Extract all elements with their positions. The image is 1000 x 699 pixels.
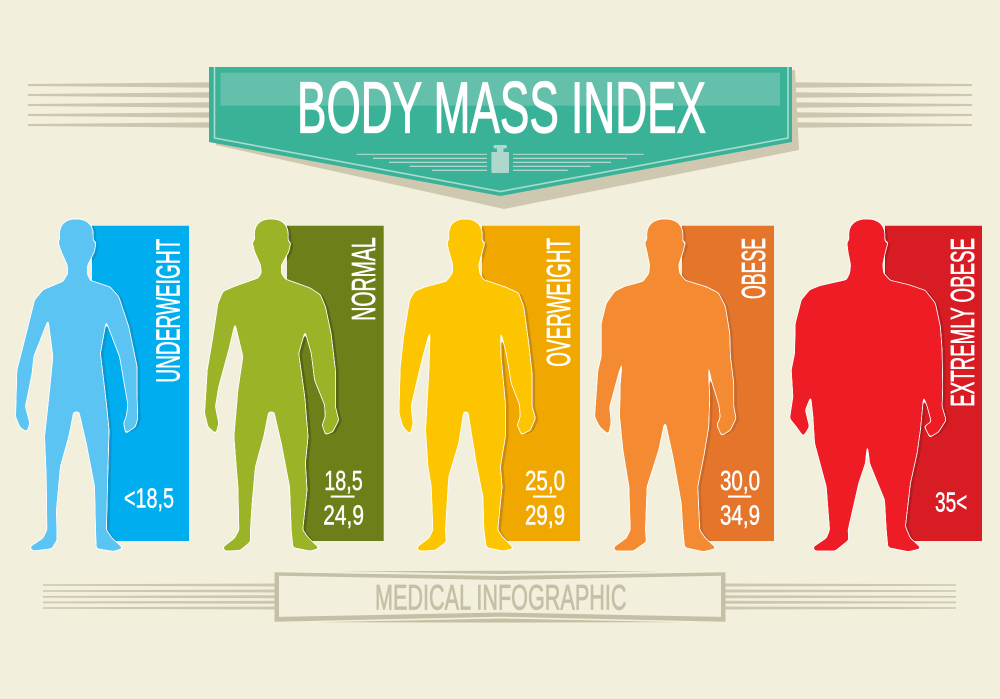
box frame: [274, 572, 726, 622]
value: [720, 465, 760, 530]
footer box: [274, 571, 726, 623]
value: 34,9: [720, 499, 760, 530]
header side lines: [28, 82, 972, 128]
banner shadow: [216, 70, 799, 209]
figure shadow: [92, 226, 141, 541]
category bar: [287, 226, 384, 541]
figure shadow: [885, 226, 949, 541]
banner inner line: [214, 67, 788, 192]
figure: overweight: [399, 219, 535, 551]
panel: extremely obese: [790, 219, 982, 552]
figure: normal: [205, 219, 338, 551]
category bar: [482, 226, 580, 541]
category bar: [885, 226, 982, 541]
value: [525, 465, 565, 530]
value: 25,0: [525, 465, 565, 496]
value: 30,0: [720, 465, 760, 496]
category bar: [92, 226, 189, 541]
title: BODY MASS INDEX: [297, 68, 706, 148]
box bottom accent: [320, 618, 680, 623]
label: NORMAL: [345, 237, 382, 321]
box top accent: [340, 571, 660, 574]
banner body: [209, 67, 792, 196]
figure: extremely obese: [790, 219, 946, 551]
value: 35<: [935, 487, 967, 518]
figure shadow: [482, 226, 538, 541]
figure shadow: [682, 226, 739, 541]
value: [323, 465, 364, 530]
label: EXTREMLY OBESE: [944, 238, 981, 407]
label: OBESE: [735, 238, 772, 299]
panel: normal: [205, 219, 384, 552]
figure shadow: [287, 226, 342, 541]
panel: underweight: [16, 219, 189, 552]
banner highlight: [220, 73, 780, 106]
icon: weight: [491, 145, 509, 173]
value: 24,9: [323, 499, 364, 530]
figure: obese: [595, 219, 736, 551]
value: 18,5: [324, 465, 363, 496]
label: OVERWEIGHT: [540, 238, 577, 367]
category bar: [682, 226, 774, 541]
label: UNDERWEIGHT: [149, 239, 186, 383]
footer text: MEDICAL INFOGRAPHIC: [375, 578, 626, 617]
title banner: [209, 67, 799, 209]
weight lines: [357, 154, 644, 171]
value: 29,9: [525, 499, 565, 530]
figure: underweight: [16, 219, 137, 551]
footer side lines: [43, 584, 956, 610]
panel: obese: [595, 219, 774, 552]
panel: overweight: [399, 219, 580, 552]
value: <18,5: [124, 483, 174, 514]
